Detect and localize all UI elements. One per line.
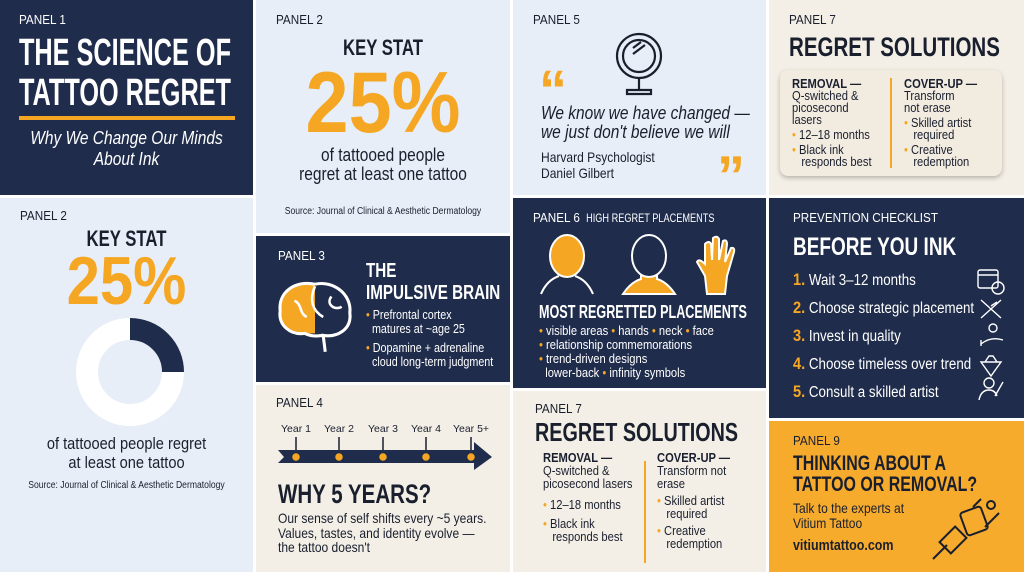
panel 6: placements — [513, 198, 766, 388]
column: removal: 12–18 months — [799, 127, 870, 142]
panel label: PANEL 3 — [278, 248, 325, 263]
icon: mirror — [616, 32, 662, 96]
body: Vitium Tattoo — [793, 515, 862, 531]
heading: MOST REGRETTED PLACEMENTS — [539, 302, 747, 322]
subtitle: Why We Change Our Minds — [30, 128, 223, 148]
heading: BEFORE YOU INK — [793, 233, 956, 261]
heading: KEY STAT — [343, 35, 423, 60]
panel 7: regret solutions card — [769, 0, 1024, 195]
stat caption: of tattooed people regret — [47, 434, 206, 453]
column: removal: REMOVAL — — [792, 76, 861, 91]
heading — [366, 260, 500, 304]
checklist: 2. Choose strategic placement — [793, 298, 974, 317]
column: cover-up: Creative — [911, 142, 953, 157]
column: removal: Q-switched & — [543, 463, 609, 478]
checklist: 1. Wait 3–12 months — [793, 270, 916, 289]
panel label: PANEL 9 — [793, 433, 840, 448]
panel label: PANEL 1 — [19, 12, 66, 27]
heading: WHY 5 YEARS? — [278, 479, 431, 509]
bullets: cloud long-term judgment — [372, 355, 493, 369]
heading: REGRET SOLUTIONS — [535, 417, 738, 447]
bullets: matures at ~age 25 — [372, 322, 465, 336]
panel label: PANEL 2 — [276, 12, 323, 27]
column: cover-up: Skilled artist — [664, 493, 724, 508]
column: cover-up: COVER-UP — — [657, 450, 730, 465]
panel label: PANEL 4 — [276, 395, 323, 410]
panel label: PANEL 6 — [533, 210, 580, 225]
column: removal: picosecond — [792, 100, 849, 115]
panel 8: prevention checklist — [769, 198, 1024, 418]
timeline arrow: Year 4 — [411, 423, 441, 435]
column: removal: responds best — [801, 154, 872, 169]
column: cover-up: Creative — [664, 523, 706, 538]
donut chart — [76, 318, 184, 426]
body text: Values, tastes, and identity evolve — — [278, 524, 475, 540]
subtitle — [30, 128, 223, 169]
column: cover-up: Skilled artist — [911, 115, 971, 130]
bullets: lower-back • infinity symbols — [545, 365, 685, 380]
column: removal — [792, 76, 872, 169]
column: cover-up — [904, 76, 978, 169]
timeline arrow: Year 1 — [281, 423, 311, 435]
panel 7b: regret solutions — [513, 391, 766, 572]
column: cover-up: COVER-UP — — [904, 76, 977, 91]
panel 2b: key stat — [256, 0, 510, 233]
url: vitiumtattoo.com — [793, 538, 893, 554]
panel 5: quote — [513, 0, 766, 195]
column: removal: Q-switched & — [792, 88, 858, 103]
quote: we just don't believe we will — [541, 122, 730, 142]
column: cover-up — [657, 450, 730, 551]
quote — [541, 103, 750, 142]
panel label: PANEL 7 — [789, 12, 836, 27]
body text: the tattoo doesn't — [278, 539, 370, 555]
checklist: 5. Consult a skilled artist — [793, 382, 939, 401]
source: Source: Journal of Clinical & Aesthetic Dermatology — [28, 480, 225, 491]
panel 3: impulsive brain — [256, 236, 510, 382]
column: cover-up: not erase — [904, 100, 951, 115]
icons: face, neck, hand — [540, 234, 736, 295]
body — [793, 500, 904, 531]
source: Source: Journal of Clinical & Aesthetic Dermatology — [285, 206, 481, 217]
icons — [977, 269, 1005, 400]
heading: THE — [366, 260, 396, 282]
card — [780, 70, 1002, 176]
caption — [299, 145, 467, 184]
divider — [890, 78, 892, 168]
timeline arrow: Year 3 — [368, 423, 398, 435]
attribution: Harvard Psychologist — [541, 149, 655, 165]
quote mark open: “ — [539, 58, 567, 121]
stat caption: at least one tattoo — [68, 453, 185, 472]
body: Talk to the experts at — [793, 500, 904, 516]
panel 1: title — [0, 0, 253, 195]
heading: TATTOO OR REMOVAL? — [793, 473, 977, 496]
timeline arrow: Year 5+ — [453, 423, 489, 435]
column: cover-up: required — [666, 506, 707, 521]
column: removal — [543, 450, 632, 544]
column: cover-up: redemption — [913, 154, 969, 169]
panel 9: call to action — [769, 421, 1024, 572]
heading: KEY STAT — [87, 226, 166, 251]
panel label: PANEL 5 — [533, 12, 580, 27]
column: cover-up: Transform not — [657, 463, 726, 478]
checklist: 3. Invest in quality — [793, 326, 901, 345]
body text — [278, 510, 486, 555]
heading: IMPULSIVE BRAIN — [366, 282, 500, 304]
underline — [19, 116, 235, 120]
title: TATTOO REGRET — [19, 72, 231, 114]
bullets: Dopamine + adrenaline — [373, 341, 484, 355]
panel label: PANEL 7 — [535, 401, 582, 416]
title: THE SCIENCE OF — [19, 32, 231, 74]
panel label: PREVENTION CHECKLIST — [793, 210, 938, 225]
panel 2: key stat with donut — [0, 198, 253, 572]
column: removal: REMOVAL — — [543, 450, 612, 465]
quote: We know we have changed — — [541, 103, 750, 123]
column: cover-up: erase — [657, 476, 685, 491]
caption: regret at least one tattoo — [299, 164, 467, 184]
body text: Our sense of self shifts every ~5 years. — [278, 510, 486, 526]
checklist — [793, 270, 974, 401]
timeline arrow: Year 2 — [324, 423, 354, 435]
panel 4: why 5 years — [256, 385, 510, 572]
divider — [644, 461, 646, 563]
column: removal: Black ink — [550, 516, 595, 531]
column: removal: responds best — [552, 529, 623, 544]
bullets — [366, 308, 494, 369]
heading: REGRET SOLUTIONS — [789, 32, 1000, 62]
column: removal: picosecond lasers — [543, 476, 632, 491]
column: cover-up: Transform — [904, 88, 955, 103]
subtitle: About Ink — [94, 149, 159, 169]
big stat: 25% — [67, 243, 186, 319]
big stat: 25% — [306, 55, 460, 151]
timeline arrow — [278, 423, 492, 470]
icon: tattoo machine — [932, 498, 1000, 560]
panel label: HIGH REGRET PLACEMENTS — [586, 211, 715, 225]
title — [19, 32, 231, 114]
column: removal: 12–18 months — [550, 497, 621, 512]
attribution: Daniel Gilbert — [541, 165, 614, 181]
column: removal: Black ink — [799, 142, 844, 157]
heading: THINKING ABOUT A — [793, 452, 946, 475]
attribution — [541, 149, 655, 181]
stat caption — [47, 434, 206, 472]
panel label — [533, 210, 715, 225]
caption: of tattooed people — [321, 145, 445, 165]
heading — [793, 452, 977, 496]
column: removal: lasers — [792, 112, 822, 127]
icon: brain — [278, 282, 352, 352]
bullets: • relationship commemorations — [539, 337, 692, 352]
column: cover-up: redemption — [666, 536, 722, 551]
bullets: • trend-driven designs — [539, 351, 647, 366]
panel label: PANEL 2 — [20, 208, 67, 223]
bullets: • visible areas • hands • neck • face — [539, 323, 714, 338]
checklist: 4. Choose timeless over trend — [793, 354, 971, 373]
bullets — [539, 323, 714, 380]
column: cover-up: required — [913, 127, 954, 142]
bullets: Prefrontal cortex — [373, 308, 452, 322]
